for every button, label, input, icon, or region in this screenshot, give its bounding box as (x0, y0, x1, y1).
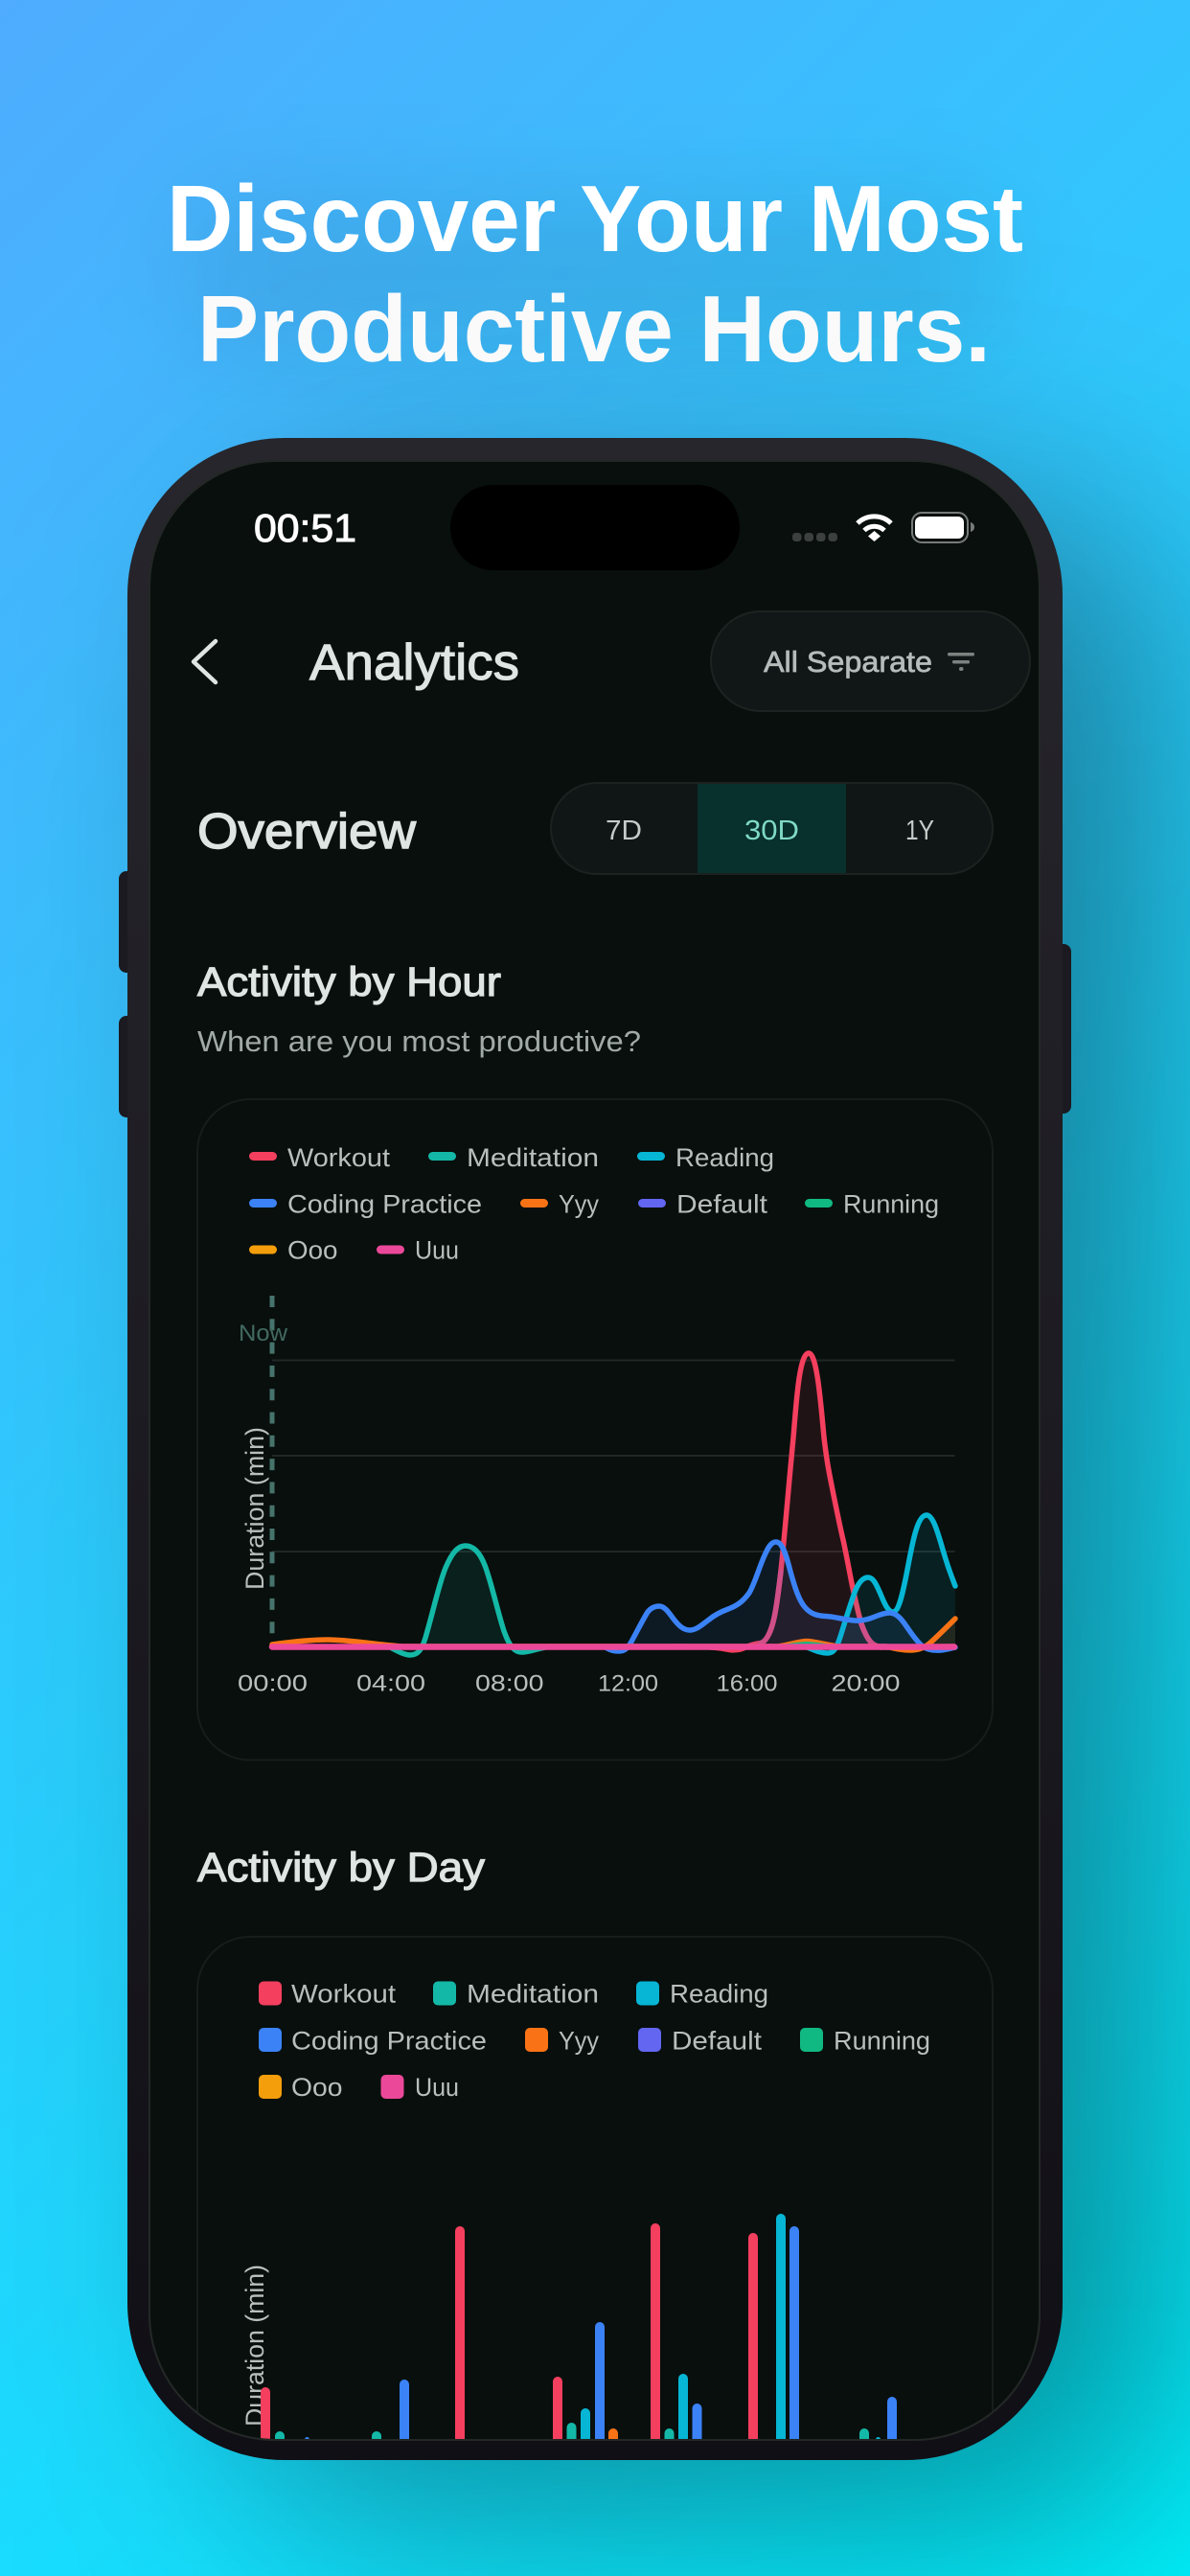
icon: battery (912, 513, 974, 542)
legend: hourly line series: Ooo (287, 1236, 337, 1265)
dynamic island (450, 485, 740, 570)
heading: Analytics: Analytics (309, 634, 519, 691)
title: Discover Your Most (167, 166, 1023, 271)
screen bottom edge (149, 461, 1040, 2440)
side buttons (119, 871, 1071, 1117)
legend: daily bar series: Yyy (559, 2026, 599, 2055)
panel: activity by day (196, 1936, 994, 2439)
bars: Coding Practice (305, 2226, 897, 2466)
legend: daily bar series: Ooo (291, 2073, 343, 2102)
panel: activity by hour (197, 1099, 993, 1760)
filter pill: All Separate: All Separate (764, 645, 932, 678)
phone wide shadow (281, 553, 1190, 2575)
title (167, 166, 1023, 381)
legend: hourly line series: Workout (287, 1143, 391, 1172)
legend: hourly line series: Default (676, 1190, 768, 1219)
status bar (254, 506, 974, 550)
period selector (551, 783, 993, 874)
y axis label: Duration (min) (240, 2265, 269, 2426)
legend: daily bar series: Reading (670, 1980, 768, 2009)
phone screen (149, 461, 1040, 2440)
legend: daily bar series: Default (672, 2026, 763, 2055)
back chevron (194, 641, 216, 682)
legend: hourly line series: Running (843, 1190, 939, 1219)
now marker: Now (239, 1321, 288, 1346)
legend: daily bar series: Meditation (467, 1980, 599, 2009)
title glow (182, 192, 1006, 355)
series: Workout (671, 1353, 954, 1650)
title: Productive Hours. (197, 276, 991, 381)
legend: hourly line series (249, 1143, 939, 1265)
clock: 00:51 (254, 506, 356, 550)
active segment: 30D (698, 784, 846, 873)
period selector: 30D (744, 816, 799, 846)
legend: hourly line series: Meditation (467, 1143, 599, 1172)
legend: daily bar series (259, 1980, 930, 2102)
workout line under coding area (761, 1572, 881, 1647)
legend: hourly line series: Yyy (559, 1190, 599, 1219)
heading: Activity by Hour: Activity by Hour (197, 959, 501, 1005)
heading: Overview: Overview (197, 804, 416, 860)
icon: wifi (858, 517, 891, 541)
phone body (127, 438, 1063, 2460)
legend: hourly line series: Coding Practice (287, 1190, 482, 1219)
x axis labels: 00:00 (238, 1671, 308, 1696)
series: Reading (805, 1515, 955, 1653)
line chart: activity by hour (238, 1296, 955, 1696)
y axis label: Duration (min) (240, 1427, 269, 1590)
series: Running (784, 1644, 830, 1646)
series: Meditation (388, 1546, 551, 1655)
series: Coding Practice (604, 1542, 955, 1651)
subtitle: When are you most productive? (197, 1024, 641, 1058)
signal dots (792, 533, 837, 541)
x axis labels (238, 1671, 901, 1696)
period selector: 1Y (905, 816, 934, 846)
bars: Reading (581, 2214, 881, 2463)
series: Yyy (272, 1619, 955, 1650)
phone drop shadow (223, 495, 1158, 2518)
period selector: 7D (606, 816, 642, 846)
phone mockup (119, 438, 1071, 2576)
legend: hourly line series: Uuu (415, 1236, 459, 1265)
series: Uuu (272, 1644, 954, 1650)
bars: Meditation (275, 2423, 869, 2461)
legend: hourly line series: Reading (675, 1143, 774, 1172)
icon: filter (948, 653, 974, 671)
bar: Yyy (608, 2428, 618, 2457)
bar chart: activity by day (245, 2214, 897, 2439)
legend: daily bar series: Uuu (415, 2073, 459, 2102)
legend: daily bar series: Workout (291, 1980, 397, 2009)
x axis labels: 12:00 (598, 1671, 658, 1696)
x axis labels: 04:00 (356, 1671, 425, 1696)
x axis labels: 16:00 (717, 1671, 778, 1696)
x axis labels: 20:00 (832, 1671, 901, 1696)
legend: daily bar series: Running (834, 2026, 930, 2055)
filter pill: All Separate (711, 611, 1030, 711)
bars: Workout (261, 2223, 758, 2439)
heading: Activity by Day: Activity by Day (197, 1845, 486, 1891)
x axis labels: 08:00 (475, 1671, 544, 1696)
legend: daily bar series: Coding Practice (291, 2026, 487, 2055)
